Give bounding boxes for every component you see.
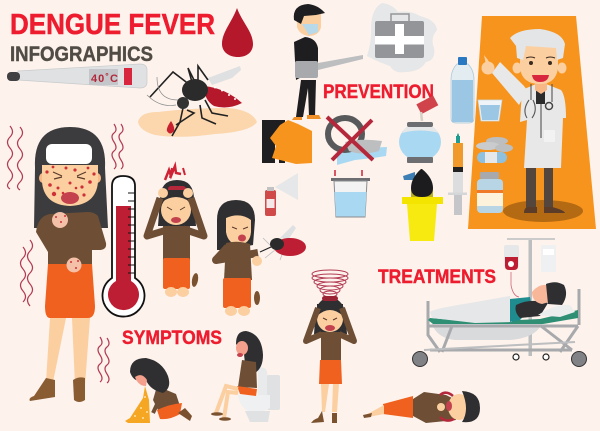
figure: patient on hospital bed xyxy=(412,282,586,366)
heading: treatments: TREATMENTS xyxy=(378,266,496,288)
title xyxy=(10,9,215,66)
icon: smoke cloud with first aid kit xyxy=(367,3,437,72)
figure: woman with rash and fever xyxy=(30,127,108,402)
icon: crossed out tire and basin xyxy=(327,117,387,165)
figure: woman collapsed on floor xyxy=(363,391,480,423)
icon: water bottle xyxy=(451,57,474,123)
icon: large thermometer xyxy=(103,176,145,317)
icon: pills xyxy=(476,137,513,163)
figure: woman on toilet xyxy=(211,331,280,422)
figure: woman vomiting xyxy=(125,358,192,423)
panel: orange backdrop xyxy=(468,16,596,229)
icon: fish bowl with larvicide xyxy=(399,95,441,163)
figure: man fogging with sprayer xyxy=(292,4,363,120)
icon: syringe xyxy=(448,133,467,215)
figure: woman bitten by mosquito xyxy=(216,200,262,316)
icon: clinical thermometer xyxy=(7,64,147,88)
icon: glass of water xyxy=(478,100,502,121)
title: DENGUE FEVER xyxy=(10,9,215,41)
icon: mosquito biting xyxy=(260,225,306,260)
icon: mosquito on skin xyxy=(138,66,257,137)
heading: prevention: PREVENTION xyxy=(323,81,434,103)
figure: woman with headache xyxy=(147,166,204,297)
icon: medicine jar xyxy=(477,172,503,213)
heading: symptoms: SYMPTOMS xyxy=(122,327,222,349)
figure: woman with dizziness xyxy=(306,270,354,423)
icon: covered water bucket xyxy=(331,170,370,217)
icon: clothes pile xyxy=(262,120,312,164)
icon: spray can xyxy=(265,173,298,216)
icon: IV stand with bags xyxy=(504,239,556,356)
icon: clinical thermometer: 40˚C xyxy=(91,73,118,85)
icon: yellow bin with garbage bag xyxy=(402,169,443,241)
wavy heat lines xyxy=(8,124,123,383)
title: INFOGRAPHICS xyxy=(10,43,153,66)
icon: blood drop xyxy=(222,8,253,57)
figure: doctor xyxy=(482,29,583,222)
